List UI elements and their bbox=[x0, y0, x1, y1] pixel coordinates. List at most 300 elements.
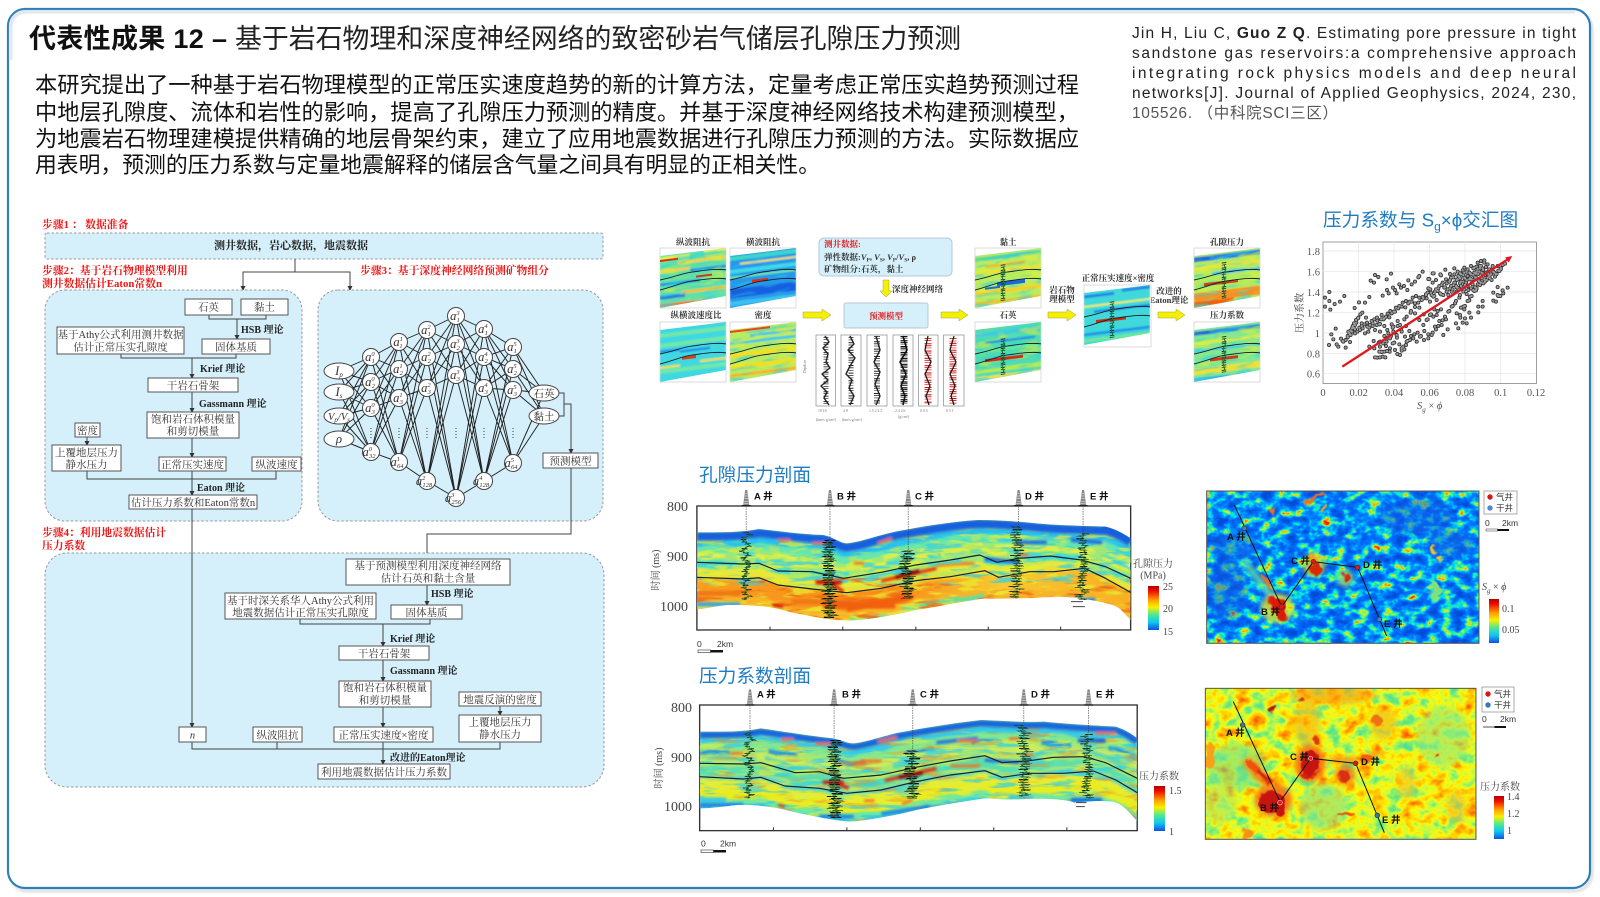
scatter chart: 1.2 bbox=[1307, 309, 1320, 320]
hidden nodes: a bbox=[390, 455, 397, 469]
hidden nodes: 4 bbox=[484, 323, 488, 330]
panel: step 4 seismic estimation: 和剪切模量 bbox=[359, 694, 411, 706]
hidden nodes: a bbox=[365, 401, 371, 415]
heading: pore pressure section: 孔隙压力剖面 bbox=[699, 464, 811, 486]
pore pressure map: E 井 bbox=[1384, 618, 1403, 630]
citation: sandstone gas reservoirs:a comprehensive approach bbox=[1132, 45, 1576, 62]
map scale bar: 0 bbox=[1482, 714, 1487, 724]
hidden nodes: a bbox=[365, 375, 371, 389]
pore pressure section bbox=[649, 490, 1173, 652]
hidden nodes: a bbox=[450, 337, 456, 351]
pore pressure section: D 井 bbox=[1025, 490, 1044, 502]
output nodes bbox=[529, 385, 559, 424]
step 4 label: 压力系数 bbox=[42, 538, 85, 552]
summary text block bbox=[35, 72, 1079, 178]
pressure coefficient section: 1000 bbox=[664, 800, 692, 815]
input nodes: /V bbox=[337, 412, 349, 423]
map legend: 干井 bbox=[1494, 700, 1511, 710]
panel: step 2 rock physics: 上覆地层压力 bbox=[55, 446, 118, 459]
input nodes: s bbox=[347, 416, 350, 424]
hidden nodes: a bbox=[507, 340, 513, 354]
hidden nodes: a bbox=[421, 323, 427, 337]
input nodes: p bbox=[333, 416, 338, 424]
hidden nodes: 3 bbox=[455, 369, 460, 376]
panel: step 2 rock physics: Krief 理论 bbox=[200, 362, 245, 375]
well log box: , bbox=[870, 252, 874, 262]
hidden nodes: a bbox=[507, 383, 513, 397]
map colorbar: 1.4 bbox=[1507, 792, 1520, 803]
title: 基于岩石物理和深度神经网络的致密砂岩气储层孔隙压力预测 bbox=[235, 24, 961, 54]
labels of seismic thumbnails: 正常压实速度×密度 bbox=[1082, 273, 1155, 283]
scatter chart: 0.08 bbox=[1456, 388, 1474, 399]
thumbnail: pressure coefficient bbox=[1194, 322, 1260, 382]
hidden nodes: 2 bbox=[427, 382, 431, 389]
hidden nodes: 0 bbox=[371, 351, 375, 358]
hidden nodes: 1 bbox=[428, 331, 431, 338]
labels of seismic thumbnails: Eaton理论 bbox=[1150, 295, 1189, 305]
hidden nodes: 2 bbox=[514, 370, 518, 377]
well log box: 测井数据: bbox=[824, 239, 861, 249]
hidden nodes: 0 bbox=[371, 376, 375, 383]
pore pressure map: B 井 bbox=[1261, 606, 1280, 618]
scatter chart: 1.4 bbox=[1307, 288, 1321, 299]
hidden nodes: 4 bbox=[484, 351, 488, 358]
hidden nodes: 3 bbox=[456, 376, 461, 383]
panel: step 4 seismic estimation: Krief 理论 bbox=[390, 632, 435, 645]
hidden nodes: a bbox=[450, 368, 456, 382]
input nodes bbox=[324, 363, 354, 447]
scatter chart: 0.6 bbox=[1307, 370, 1320, 381]
prediction model: 预测模型 bbox=[869, 311, 903, 321]
flowchart bbox=[42, 217, 604, 787]
summary text block: 用表明，预测的压力系数与定量地震解释的储层含气量之间具有明显的正相关性。 bbox=[35, 152, 820, 178]
colorbar: 20 bbox=[1163, 604, 1173, 615]
hidden nodes: a bbox=[393, 362, 399, 376]
title: 代表性成果 12 – bbox=[29, 24, 227, 54]
summary text block: 本研究提出了一种基于岩石物理模型的正常压实速度趋势的新的计算方法，定量考虑正常压实趋势预测过程 bbox=[35, 72, 1079, 98]
pressure coefficient section: E 井 bbox=[1096, 688, 1115, 700]
map colorbar: 压力系数 bbox=[1480, 780, 1520, 793]
pore pressure section: A 井 bbox=[754, 490, 773, 502]
panel: step 4 seismic estimation bbox=[45, 509, 604, 787]
output nodes: 黏土 bbox=[534, 410, 555, 423]
pore pressure map bbox=[1207, 491, 1520, 643]
pressure coefficient section bbox=[652, 688, 1182, 852]
scatter chart: 0.04 bbox=[1385, 388, 1404, 399]
output nodes: 石英 bbox=[534, 387, 555, 400]
hidden nodes: a bbox=[478, 322, 484, 336]
scatter chart: 0 bbox=[1320, 388, 1326, 399]
hidden nodes: 1 bbox=[372, 358, 375, 365]
input nodes: p bbox=[338, 371, 343, 379]
citation: networks[J]. Journal of Applied Geophysics, 2024, 230, bbox=[1132, 85, 1576, 102]
step 2 label bbox=[42, 263, 188, 290]
panel: step 2 rock physics: 正常压实速度 bbox=[161, 458, 224, 471]
hidden nodes: a bbox=[504, 456, 511, 470]
labels of seismic thumbnails: 石英 bbox=[999, 310, 1017, 320]
hidden nodes: 5 bbox=[513, 341, 517, 348]
scatter chart: 1.6 bbox=[1307, 268, 1320, 279]
data bar bbox=[45, 233, 603, 259]
thumbnail: Vp/Vs bbox=[660, 322, 726, 382]
hidden nodes: 3 bbox=[427, 389, 432, 396]
map colorbar: g bbox=[1487, 587, 1491, 595]
scatter chart: g bbox=[1422, 406, 1426, 414]
map legend: 气井 bbox=[1494, 689, 1511, 699]
panel: step 4 seismic estimation: 上覆地层压力 bbox=[468, 716, 532, 728]
panel: step 4 seismic estimation: 固体基质 bbox=[406, 606, 448, 619]
pressure coefficient map: A 井 bbox=[1226, 727, 1245, 739]
connector to seismic panel bbox=[427, 468, 571, 559]
thumbnail: normal compaction velocity bbox=[1084, 284, 1152, 348]
pore pressure map: A 井 bbox=[1227, 531, 1246, 543]
panel: step 2 rock physics: 估计压力系数和Eaton常数n bbox=[131, 496, 256, 509]
panel: step 4 seismic estimation: 改进的Eaton理论 bbox=[390, 751, 466, 764]
pore pressure section: 900 bbox=[667, 550, 688, 565]
panel: step 2 rock physics bbox=[45, 290, 302, 521]
hidden nodes: 1 bbox=[485, 330, 488, 337]
panel: step 2 rock physics: 基于Athy公式利用测井数据 bbox=[58, 328, 184, 341]
panel: step 4 seismic estimation: 干岩石骨架 bbox=[358, 647, 411, 660]
labels of seismic thumbnails bbox=[670, 237, 1244, 320]
panel: step 2 rock physics: 密度 bbox=[77, 424, 98, 437]
labels of seismic thumbnails: 孔隙压力 bbox=[1210, 237, 1244, 247]
network edges bbox=[339, 316, 544, 498]
input nodes: I bbox=[335, 364, 339, 378]
labels of seismic thumbnails: 岩石物 bbox=[1049, 285, 1075, 295]
hidden nodes: 64 bbox=[511, 464, 518, 471]
yellow arrows bbox=[803, 309, 1185, 321]
pore pressure section: 时间 (ms) bbox=[649, 550, 662, 590]
colorbar: 1.5 bbox=[1169, 786, 1182, 797]
logs: (km/s·g/cm³) bbox=[816, 418, 837, 422]
thumbnail: quartz bbox=[974, 322, 1042, 382]
hidden nodes: 3 bbox=[371, 409, 376, 416]
labels of seismic thumbnails: 黏土 bbox=[999, 237, 1017, 247]
hidden nodes: 2 bbox=[427, 351, 431, 358]
pore pressure section: B 井 bbox=[837, 490, 856, 502]
hidden nodes: a bbox=[421, 350, 427, 364]
labels of seismic thumbnails: 纵波阻抗 bbox=[676, 237, 710, 247]
map scale bar: 2km bbox=[1502, 518, 1518, 528]
pressure coefficient section: A 井 bbox=[757, 688, 776, 700]
input nodes: ρ bbox=[335, 432, 342, 446]
labels of seismic thumbnails: 横波阻抗 bbox=[746, 237, 780, 247]
thumbnail: density bbox=[730, 322, 796, 382]
panel: step 4 seismic estimation: 地震数据估计正常压实孔隙度 bbox=[232, 606, 369, 619]
pore pressure map: C 井 bbox=[1291, 555, 1310, 567]
input nodes: s bbox=[340, 392, 343, 400]
scatter chart: 0.12 bbox=[1527, 388, 1545, 399]
citation: 105526. （中科院SCI三区） bbox=[1132, 103, 1338, 122]
hidden nodes: 2 bbox=[372, 383, 376, 390]
panel: step 2 rock physics: 黏土 bbox=[254, 300, 275, 314]
panel: step 4 seismic estimation: 利用地震数据估计压力系数 bbox=[321, 766, 447, 778]
scatter chart: 1 bbox=[1315, 329, 1320, 340]
pressure coefficient section: 时间 (ms) bbox=[652, 748, 665, 788]
hidden nodes: a bbox=[507, 362, 513, 376]
citation: integrating rock physics models and deep neural bbox=[1132, 65, 1576, 82]
hidden nodes: a bbox=[473, 474, 479, 488]
summary text block: 中地层孔隙度、流体和岩性的影响，提高了孔隙压力预测的精度。并基于深度神经网络技术构建预测模型， bbox=[35, 100, 1079, 125]
thumbnail: pore pressure bbox=[1194, 248, 1260, 308]
hidden nodes: 1 bbox=[399, 392, 403, 399]
panel: step 4 seismic estimation: 基于预测模型利用深度神经网络 bbox=[354, 559, 502, 572]
hidden nodes: 2 bbox=[427, 324, 431, 331]
labels of seismic thumbnails: 压力系数 bbox=[1210, 310, 1244, 320]
arrow: deep neural network bbox=[880, 280, 944, 297]
hidden nodes: a bbox=[393, 391, 399, 405]
panel: step 2 rock physics: 饱和岩石体积模量 bbox=[151, 412, 235, 426]
colorbar: 压力系数 bbox=[1139, 770, 1179, 782]
scale bar: 0 bbox=[701, 838, 706, 848]
step 3 label: 步骤3：基于深度神经网络预测矿物组分 bbox=[360, 263, 549, 277]
pressure coefficient map bbox=[1203, 686, 1520, 839]
labels of seismic thumbnails: 纵横波速度比 bbox=[670, 310, 722, 320]
hidden nodes: 4 bbox=[479, 475, 483, 482]
hidden nodes bbox=[362, 308, 522, 506]
scatter chart: 0.1 bbox=[1494, 388, 1507, 399]
map legend bbox=[1484, 491, 1517, 514]
well log box: / bbox=[895, 252, 899, 262]
step 2 label: 测井数据估计Eaton常数n bbox=[42, 276, 162, 290]
map scale bar bbox=[1482, 714, 1516, 728]
heading: scatter: ×ϕ交汇图 bbox=[1441, 210, 1518, 230]
scatter chart: 0.8 bbox=[1307, 349, 1320, 360]
connector from data bar bbox=[243, 259, 350, 290]
logs: 1.5 2 2.5 bbox=[869, 409, 882, 413]
well log box: P bbox=[867, 258, 871, 264]
logs: 0.5 1 bbox=[946, 409, 954, 413]
pressure coefficient map: E 井 bbox=[1382, 814, 1401, 826]
colorbar bbox=[1139, 770, 1182, 838]
panel: step 4 seismic estimation: 饱和岩石体积模量 bbox=[343, 681, 427, 694]
pore pressure section: C 井 bbox=[915, 490, 934, 502]
well log box: V bbox=[887, 252, 894, 262]
panel: step 2 rock physics: 石英 bbox=[198, 300, 219, 314]
hidden nodes: a bbox=[421, 381, 427, 395]
map colorbar: 0.1 bbox=[1502, 604, 1514, 615]
hidden nodes: a bbox=[450, 309, 456, 323]
hidden nodes: a bbox=[416, 474, 422, 488]
hidden nodes: 3 bbox=[513, 391, 518, 398]
hidden nodes: 256 bbox=[451, 499, 462, 506]
map colorbar: 1 bbox=[1507, 826, 1512, 837]
map colorbar bbox=[1482, 582, 1520, 643]
hidden nodes: 2 bbox=[400, 370, 404, 377]
colorbar: 25 bbox=[1163, 582, 1173, 593]
hidden nodes: 3 bbox=[450, 492, 455, 499]
scatter chart: 0.06 bbox=[1421, 388, 1439, 399]
scale bar bbox=[701, 838, 736, 852]
map legend: 干井 bbox=[1496, 503, 1513, 513]
scale bar bbox=[697, 639, 733, 652]
step 2 label: 步骤2：基于岩石物理模型利用 bbox=[42, 263, 188, 277]
panel: step 2 rock physics: 静水压力 bbox=[66, 458, 108, 471]
well log box: 弹性数据:V bbox=[824, 252, 867, 262]
input nodes: V bbox=[328, 412, 334, 423]
hidden nodes: a bbox=[445, 491, 451, 505]
data bar: 测井数据，岩心数据，地震数据 bbox=[214, 238, 368, 252]
pore pressure section: 800 bbox=[667, 500, 688, 515]
map colorbar: 0.05 bbox=[1502, 625, 1520, 636]
step 4 label: 步骤4：利用地震数据估计 bbox=[42, 525, 166, 539]
hidden nodes: 0 bbox=[369, 446, 373, 453]
hidden nodes: 5 bbox=[513, 384, 517, 391]
thumbnail: clay bbox=[974, 248, 1042, 308]
well log box: 矿物组分:石英，黏土 bbox=[824, 264, 904, 275]
hidden nodes: 64 bbox=[397, 463, 404, 470]
heading: pressure coefficient section: 压力系数剖面 bbox=[699, 666, 811, 686]
pressure coefficient map: D 井 bbox=[1361, 756, 1380, 768]
map colorbar: ϕ bbox=[1501, 582, 1506, 593]
map legend: 气井 bbox=[1496, 492, 1513, 502]
colorbar bbox=[1133, 557, 1173, 638]
hidden nodes: 1 bbox=[400, 336, 403, 343]
hidden nodes: 2 bbox=[457, 345, 461, 352]
workflow diagram bbox=[660, 237, 1260, 422]
hidden nodes: 3 bbox=[455, 310, 460, 317]
panel: step 2 rock physics: 估计正常压实孔隙度 bbox=[73, 340, 168, 354]
hidden nodes: 1 bbox=[399, 343, 403, 350]
hidden nodes: 1 bbox=[514, 348, 517, 355]
well log box: S bbox=[904, 258, 907, 264]
logs bbox=[803, 335, 964, 422]
labels of seismic thumbnails: 理模型 bbox=[1049, 294, 1075, 304]
map legend bbox=[1482, 687, 1514, 712]
panel: step 4 seismic estimation: 正常压实速度×密度 bbox=[339, 728, 429, 742]
pore pressure section: E 井 bbox=[1090, 490, 1109, 502]
hidden nodes: a bbox=[478, 350, 484, 364]
logs: Depth/m bbox=[803, 360, 807, 373]
well log box: , ρ bbox=[907, 252, 917, 262]
panel: step 2 rock physics: Gassmann 理论 bbox=[199, 397, 267, 410]
colorbar: 孔隙压力 bbox=[1133, 557, 1173, 570]
thumbnail: S impedance bbox=[730, 248, 796, 308]
scatter chart: S bbox=[1417, 401, 1422, 412]
hidden nodes: 128 bbox=[422, 482, 433, 489]
scatter chart: ϕ bbox=[1437, 401, 1442, 412]
prediction model box: 预测模型 bbox=[550, 454, 592, 468]
scatter chart: 1.8 bbox=[1307, 247, 1320, 258]
hidden nodes: 2 bbox=[428, 358, 432, 365]
logs: 10 18 bbox=[818, 409, 827, 413]
well log box: S bbox=[880, 258, 883, 264]
summary text block: 为地震岩石物理建模提供精确的地层骨架约束，建立了应用地震数据进行孔隙压力预测的方法。实际数据应 bbox=[35, 126, 1079, 152]
hidden nodes: a bbox=[393, 335, 400, 349]
panel: step 2 rock physics: HSB 理论 bbox=[241, 323, 284, 336]
scale bar: 2km bbox=[720, 838, 736, 848]
step 1 label: 步骤1 ： 数据准备 bbox=[42, 217, 129, 231]
hidden nodes: 5 bbox=[511, 457, 515, 464]
map colorbar bbox=[1480, 780, 1520, 839]
colorbar: (MPa) bbox=[1140, 570, 1166, 582]
logs: 2.4 2.6 bbox=[895, 409, 906, 413]
pressure coefficient map: B 井 bbox=[1260, 802, 1280, 814]
panel: step 4 seismic estimation: Gassmann 理论 bbox=[390, 664, 458, 677]
panel: step 4 seismic estimation: 估计石英和黏土含量 bbox=[381, 572, 475, 584]
scatter chart: 压力系数 bbox=[1293, 293, 1306, 333]
labels of seismic thumbnails: 密度 bbox=[754, 310, 772, 320]
heading: scatter: g bbox=[1434, 220, 1441, 234]
hidden nodes: 5 bbox=[513, 363, 517, 370]
pressure coefficient section: B 井 bbox=[842, 688, 862, 700]
step 4 label bbox=[42, 525, 166, 552]
panel: step 4 seismic estimation: HSB 理论 bbox=[431, 587, 474, 600]
scatter chart bbox=[1293, 242, 1545, 414]
map scale bar: 2km bbox=[1500, 714, 1516, 724]
input nodes: I bbox=[336, 385, 340, 399]
pressure coefficient map: C 井 bbox=[1290, 751, 1310, 763]
hidden nodes: a bbox=[362, 445, 369, 459]
hidden nodes: 128 bbox=[479, 482, 490, 489]
panel: step 4 seismic estimation: 基于时深关系华人Athy公式利用 bbox=[227, 594, 374, 607]
colorbar: 15 bbox=[1163, 627, 1173, 638]
scatter chart: × bbox=[1426, 401, 1437, 412]
hidden nodes: 3 bbox=[455, 338, 460, 345]
logs: (km/s·g/cm³) bbox=[842, 418, 863, 422]
panel: step 2 rock physics: 和剪切模量 bbox=[167, 424, 219, 438]
hidden nodes: 32 bbox=[368, 453, 376, 460]
well log box bbox=[819, 238, 952, 276]
map scale bar: 0 bbox=[1485, 518, 1490, 528]
scale bar: 0 bbox=[697, 639, 702, 649]
well log box: P bbox=[893, 258, 897, 264]
panel: step 2 rock physics: 纵波速度 bbox=[256, 458, 298, 471]
panel: step 2 rock physics: Eaton 理论 bbox=[197, 481, 245, 494]
hidden nodes: 2 bbox=[422, 475, 426, 482]
pore pressure map: D 井 bbox=[1363, 559, 1382, 571]
well log box: V bbox=[874, 252, 881, 262]
panel: step 3 neural network bbox=[318, 290, 603, 521]
logs: (g/cm³) bbox=[898, 415, 910, 419]
map colorbar: S bbox=[1482, 582, 1487, 593]
well log box: V bbox=[899, 252, 906, 262]
panel: step 2 rock physics: 干岩石骨架 bbox=[167, 379, 220, 392]
colorbar: 1 bbox=[1169, 827, 1174, 838]
heading: scatter: 压力系数与 S bbox=[1323, 210, 1434, 230]
hidden nodes: 4 bbox=[484, 382, 488, 389]
panel: step 4 seismic estimation: 地震反演的密度 bbox=[463, 693, 537, 706]
map colorbar: × bbox=[1490, 582, 1501, 593]
hidden nodes: 0 bbox=[371, 402, 375, 409]
hidden nodes: 1 bbox=[457, 317, 460, 324]
pressure coefficient section: D 井 bbox=[1031, 688, 1050, 700]
hidden nodes: 1 bbox=[397, 456, 400, 463]
pressure coefficient section: 800 bbox=[671, 701, 692, 716]
thumbnail: P impedance bbox=[660, 248, 726, 308]
panel: step 4 seismic estimation: 纵波阻抗 bbox=[256, 728, 299, 742]
logs: 0 0.5 bbox=[920, 409, 928, 413]
map scale bar bbox=[1485, 518, 1518, 531]
panel: step 2 rock physics: 固体基质 bbox=[215, 340, 257, 354]
pore pressure section: 1000 bbox=[660, 600, 688, 615]
hidden nodes: 3 bbox=[484, 389, 489, 396]
hidden nodes: 2 bbox=[485, 358, 489, 365]
hidden nodes: 1 bbox=[399, 363, 403, 370]
hidden nodes: a bbox=[478, 381, 484, 395]
citation: Jin H, Liu C, Guo Z Q. Estimating pore pressure in tight bbox=[1132, 25, 1577, 42]
prediction model bbox=[844, 303, 928, 328]
arrow: deep neural network: 深度神经网络 bbox=[892, 284, 944, 294]
panel: step 4 seismic estimation: 静水压力 bbox=[479, 728, 521, 741]
labels of seismic thumbnails: 改进的 bbox=[1156, 286, 1182, 296]
hidden nodes: a bbox=[365, 350, 371, 364]
pressure coefficient section: C 井 bbox=[920, 688, 940, 700]
scale bar: 2km bbox=[717, 639, 733, 649]
prediction model box bbox=[543, 453, 598, 468]
map colorbar: 1.2 bbox=[1507, 809, 1520, 820]
